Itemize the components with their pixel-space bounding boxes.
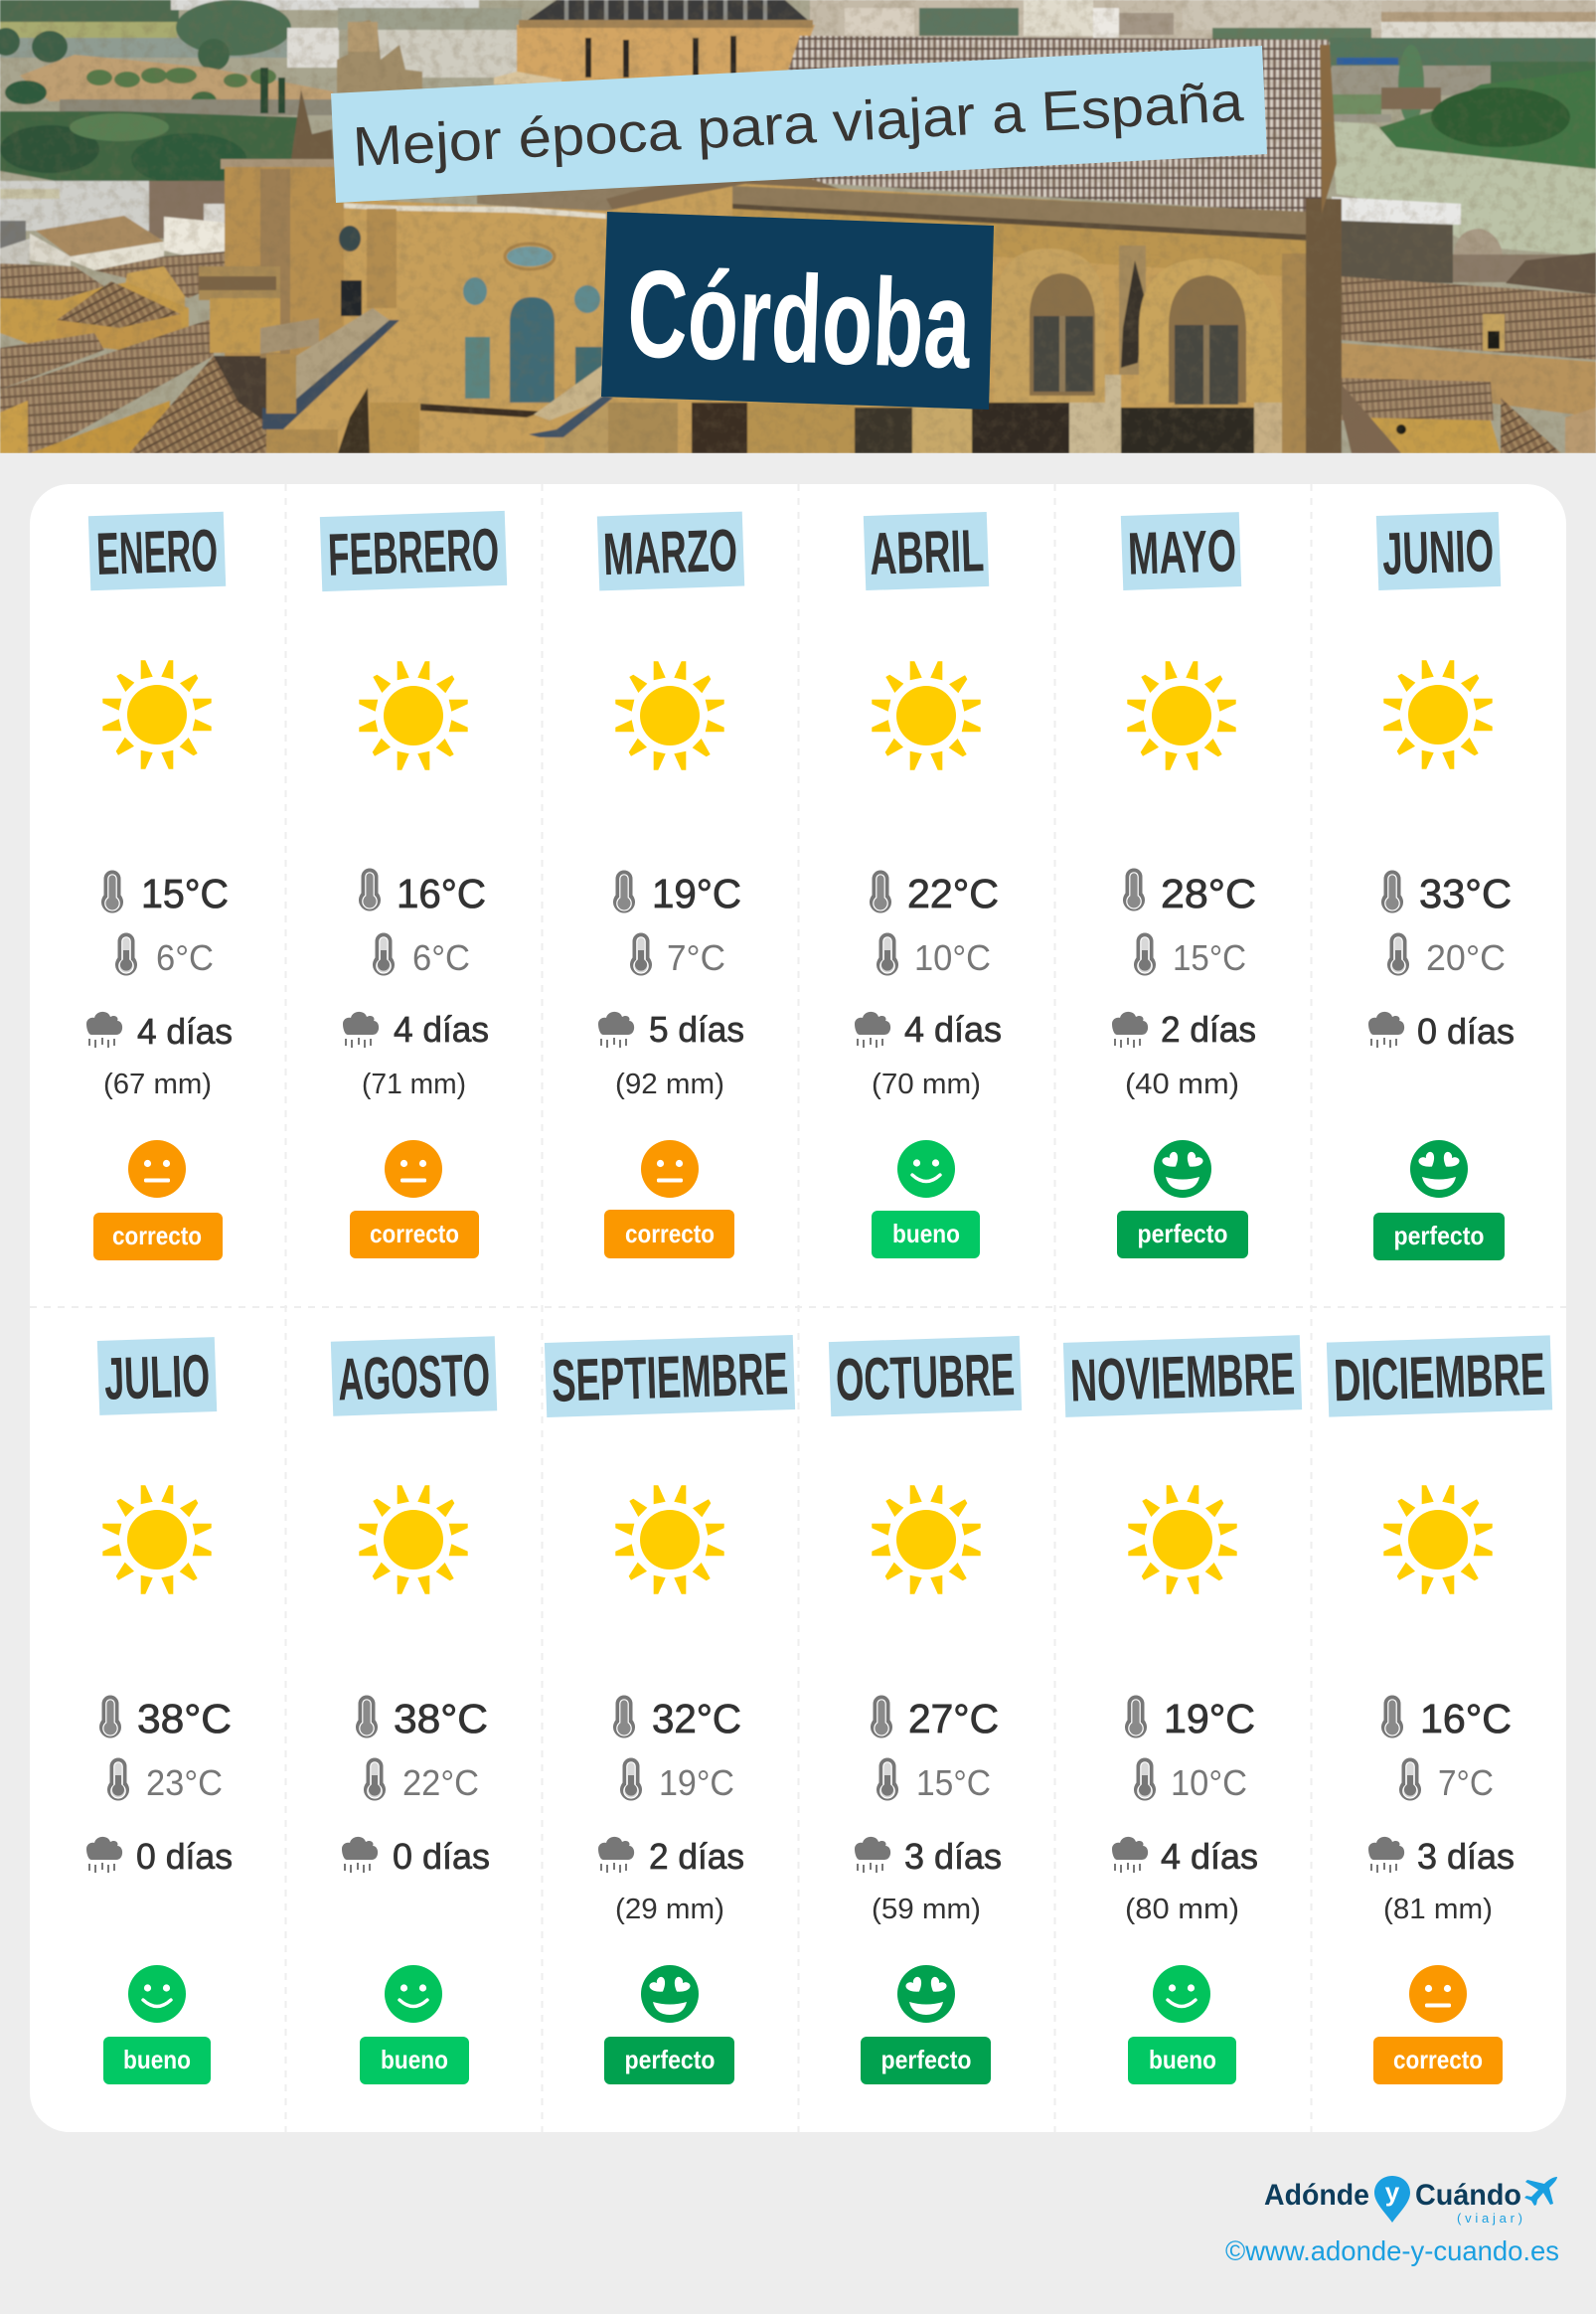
right arches: [1016, 248, 1105, 404]
low temperature: 7°C: [1438, 1762, 1494, 1803]
month label: [97, 1337, 217, 1415]
logo: Adónde y Cuándo: (viajar): [1457, 2211, 1522, 2226]
low temperature: [630, 932, 725, 978]
high temperature: 32°C: [652, 1696, 741, 1741]
icon: neutral face: [385, 1140, 442, 1198]
website: ©www.adonde-y-cuando.es: [1225, 2235, 1559, 2266]
rain days: 4 días: [137, 1011, 233, 1052]
low temperature: 23°C: [146, 1762, 223, 1803]
rain days: [1368, 1011, 1515, 1052]
month: agosto: [331, 1336, 497, 2084]
left houses: [0, 181, 149, 231]
month label: [1063, 1335, 1302, 1417]
high temperature: 16°C: [1420, 1696, 1512, 1741]
low temperature: 15°C: [916, 1762, 991, 1803]
high temperature: 33°C: [1419, 871, 1512, 916]
low temperature: [1134, 932, 1246, 978]
month: marzo: [597, 512, 744, 1258]
rain days: [86, 1011, 233, 1052]
high temperature: [1125, 1696, 1255, 1741]
rainfall: (80 mm): [1125, 1894, 1239, 1925]
month label: JUNIO: [1381, 517, 1495, 587]
month label: [320, 511, 507, 591]
rainfall: (92 mm): [615, 1069, 724, 1100]
rating badge: perfecto: [1137, 1219, 1228, 1248]
low temperature: [877, 932, 991, 978]
high temperature: [613, 871, 741, 916]
month label: [545, 1335, 795, 1417]
high temperature: [356, 1696, 488, 1741]
icon: map pin: y: [1385, 2177, 1400, 2207]
high temperature: 38°C: [394, 1696, 488, 1741]
low temperature: [620, 1757, 734, 1803]
lower strip: [608, 403, 678, 453]
month label: ENERO: [95, 517, 219, 587]
icon: sun: [359, 661, 468, 770]
high temperature: [870, 871, 999, 916]
rating badge: correcto: [370, 1219, 459, 1248]
low temperature: [1399, 1757, 1494, 1803]
top town right of dome: [810, 0, 1596, 40]
high temperature: [1381, 871, 1512, 916]
rating badge: [1373, 2037, 1503, 2084]
river side: [1330, 38, 1596, 68]
rating badge: bueno: [123, 2045, 191, 2074]
rain days: [1368, 1836, 1515, 1877]
month label: [829, 1336, 1022, 1416]
rain days: [598, 1009, 744, 1050]
month: septiembre: [545, 1335, 795, 2084]
ornate tower: [337, 20, 422, 94]
logo: Adónde y Cuándo: Adónde: [1264, 2179, 1369, 2212]
icon: heart-eyes face: [1410, 1140, 1468, 1198]
high temperature: [1381, 1696, 1512, 1741]
rating badge: correcto: [625, 1219, 715, 1248]
city name: Córdoba: [625, 245, 974, 395]
title text: Mejor época para viajar a España: [351, 70, 1245, 178]
low temperature: 7°C: [667, 937, 725, 978]
rainfall: (29 mm): [615, 1894, 724, 1925]
icon: neutral face: [641, 1140, 699, 1198]
rain days: 0 días: [136, 1836, 233, 1877]
rating badge: [1117, 1211, 1248, 1258]
city banner: [601, 212, 994, 410]
rating badge: [93, 1213, 223, 1260]
rating badge: [103, 2037, 211, 2084]
low temperature: 20°C: [1426, 937, 1506, 978]
month: octubre: [829, 1336, 1022, 2084]
rainfall: (67 mm): [103, 1069, 212, 1100]
rain days: [342, 1836, 490, 1877]
rainfall: (71 mm): [362, 1069, 466, 1100]
centre buttress: [534, 365, 603, 420]
icon: sun: [615, 1485, 724, 1594]
month: junio: [1368, 512, 1515, 1260]
icon: sun: [1383, 1485, 1493, 1594]
rating badge: [1128, 2037, 1236, 2084]
month label: [1121, 512, 1241, 590]
logo: Adónde y Cuándo: Cuándo: [1415, 2179, 1521, 2212]
low temperature: [877, 1757, 991, 1803]
low temperature: [107, 1757, 223, 1803]
left town backdrop: [0, 0, 179, 22]
icon: sun: [102, 660, 212, 769]
high temperature: 38°C: [137, 1696, 232, 1741]
rainfall: (59 mm): [872, 1894, 981, 1925]
rating badge: [604, 1210, 734, 1258]
icon: smiling face: [1153, 1965, 1210, 2023]
rain days: 4 días: [904, 1009, 1002, 1050]
rainfall: (70 mm): [872, 1069, 981, 1100]
month label: [597, 512, 744, 590]
rating badge: [872, 1211, 980, 1258]
rain days: [343, 1009, 489, 1050]
icon: sun: [102, 1485, 212, 1594]
icon: smiling face: [897, 1140, 955, 1198]
rain days: [598, 1836, 744, 1877]
rain days: [855, 1836, 1002, 1877]
icon: plane: [1524, 2177, 1557, 2206]
title banner: [331, 46, 1267, 203]
great roof: [750, 36, 1329, 214]
rainfall: (81 mm): [1383, 1894, 1493, 1925]
rating badge: [360, 2037, 469, 2084]
icon: sun: [615, 661, 724, 770]
high temperature: 15°C: [141, 871, 229, 916]
low temperature: 10°C: [1171, 1762, 1247, 1803]
rain days: 2 días: [1161, 1009, 1256, 1050]
month: diciembre: [1327, 1335, 1552, 2084]
high temperature: 19°C: [652, 871, 741, 916]
rain days: 3 días: [904, 1836, 1002, 1877]
month label: MAYO: [1127, 517, 1237, 587]
dome: [528, 0, 808, 21]
low temperature: 15°C: [1173, 937, 1246, 978]
rain days: [86, 1836, 233, 1877]
rain days: 3 días: [1417, 1836, 1515, 1877]
high temperature: [99, 1696, 232, 1741]
icon: sun: [359, 1485, 468, 1594]
left buttress: [260, 318, 319, 354]
right roofs and lower wall: [1340, 276, 1596, 360]
rain days: 0 días: [393, 1836, 490, 1877]
low temperature: 22°C: [402, 1762, 479, 1803]
low temperature: 10°C: [914, 937, 991, 978]
low temperature: 19°C: [659, 1762, 734, 1803]
cathedral walls: [266, 184, 1342, 453]
month label: JULIO: [103, 1342, 211, 1412]
high temperature: 22°C: [907, 871, 999, 916]
high temperature: 19°C: [1164, 1696, 1255, 1741]
month label: [864, 512, 989, 590]
icon: map pin: [1374, 2176, 1410, 2223]
month label: [88, 512, 226, 590]
month label: AGOSTO: [337, 1341, 491, 1413]
icon: sun: [872, 1485, 981, 1594]
month label: MARZO: [602, 517, 738, 587]
icon: heart-eyes face: [1154, 1140, 1211, 1198]
icon: sun: [1383, 660, 1493, 769]
rain days: 5 días: [649, 1009, 744, 1050]
rating badge: [604, 2037, 734, 2084]
high temperature: [1123, 869, 1256, 916]
rating badge: bueno: [1149, 2045, 1216, 2074]
month: febrero: [320, 511, 507, 1258]
month label: FEBRERO: [327, 516, 500, 588]
high temperature: 28°C: [1161, 871, 1256, 916]
low temperature: [1134, 1757, 1247, 1803]
rating badge: bueno: [892, 1219, 960, 1248]
low temperature: 6°C: [156, 937, 214, 978]
rating badge: perfecto: [880, 2045, 972, 2074]
rain days: [855, 1009, 1002, 1050]
icon: heart-eyes face: [897, 1965, 955, 2023]
header photo: Mezquita de Córdoba: [0, 0, 1596, 453]
rating badge: [1373, 1213, 1505, 1260]
rain days: 0 días: [1417, 1011, 1515, 1052]
low temperature: [373, 932, 470, 978]
month label: OCTUBRE: [835, 1341, 1016, 1413]
month: mayo: [1112, 512, 1256, 1258]
low temperature: 6°C: [412, 937, 470, 978]
month label: NOVIEMBRE: [1069, 1340, 1296, 1414]
icon: sun: [1128, 1485, 1237, 1594]
high temperature: 27°C: [908, 1696, 999, 1741]
icon: smiling face: [385, 1965, 442, 2023]
high temperature: 16°C: [397, 871, 486, 916]
calendar panel: [30, 484, 1566, 2132]
rain days: 4 días: [1161, 1836, 1258, 1877]
rating badge: correcto: [112, 1221, 202, 1250]
high temperature: [359, 869, 486, 916]
high temperature: [871, 1696, 999, 1741]
low temperature: [115, 932, 214, 978]
month label: ABRIL: [869, 517, 985, 587]
rating badge: correcto: [1393, 2045, 1483, 2074]
high temperature: [101, 871, 229, 916]
month: noviembre: [1063, 1335, 1302, 2084]
rating badge: [350, 1211, 479, 1258]
rain days: [1112, 1009, 1256, 1050]
high temperature: [613, 1696, 741, 1741]
icon: sun: [1127, 661, 1236, 770]
month: enero: [86, 512, 233, 1260]
rain days: 4 días: [394, 1009, 489, 1050]
rating badge: perfecto: [624, 2045, 716, 2074]
icon: smiling face: [128, 1965, 186, 2023]
logo: Adónde y Cuándo: [1264, 2176, 1557, 2226]
month label: [331, 1336, 497, 1416]
low temperature: [1387, 932, 1506, 978]
icon: sun: [872, 661, 981, 770]
icon: neutral face: [1409, 1965, 1467, 2023]
icon: neutral face: [128, 1140, 186, 1198]
month label: [1376, 512, 1501, 590]
rain days: [1112, 1836, 1258, 1877]
month: julio: [86, 1337, 233, 2084]
icon: heart-eyes face: [641, 1965, 699, 2023]
month label: SEPTIEMBRE: [551, 1340, 789, 1414]
rating badge: bueno: [381, 2045, 448, 2074]
low temperature: [364, 1757, 479, 1803]
rainfall: (40 mm): [1125, 1069, 1239, 1100]
cathedral openings: [339, 226, 361, 251]
rating badge: [861, 2037, 991, 2084]
rain days: 2 días: [649, 1836, 744, 1877]
month: abril: [855, 512, 1002, 1258]
rating badge: perfecto: [1393, 1221, 1485, 1250]
